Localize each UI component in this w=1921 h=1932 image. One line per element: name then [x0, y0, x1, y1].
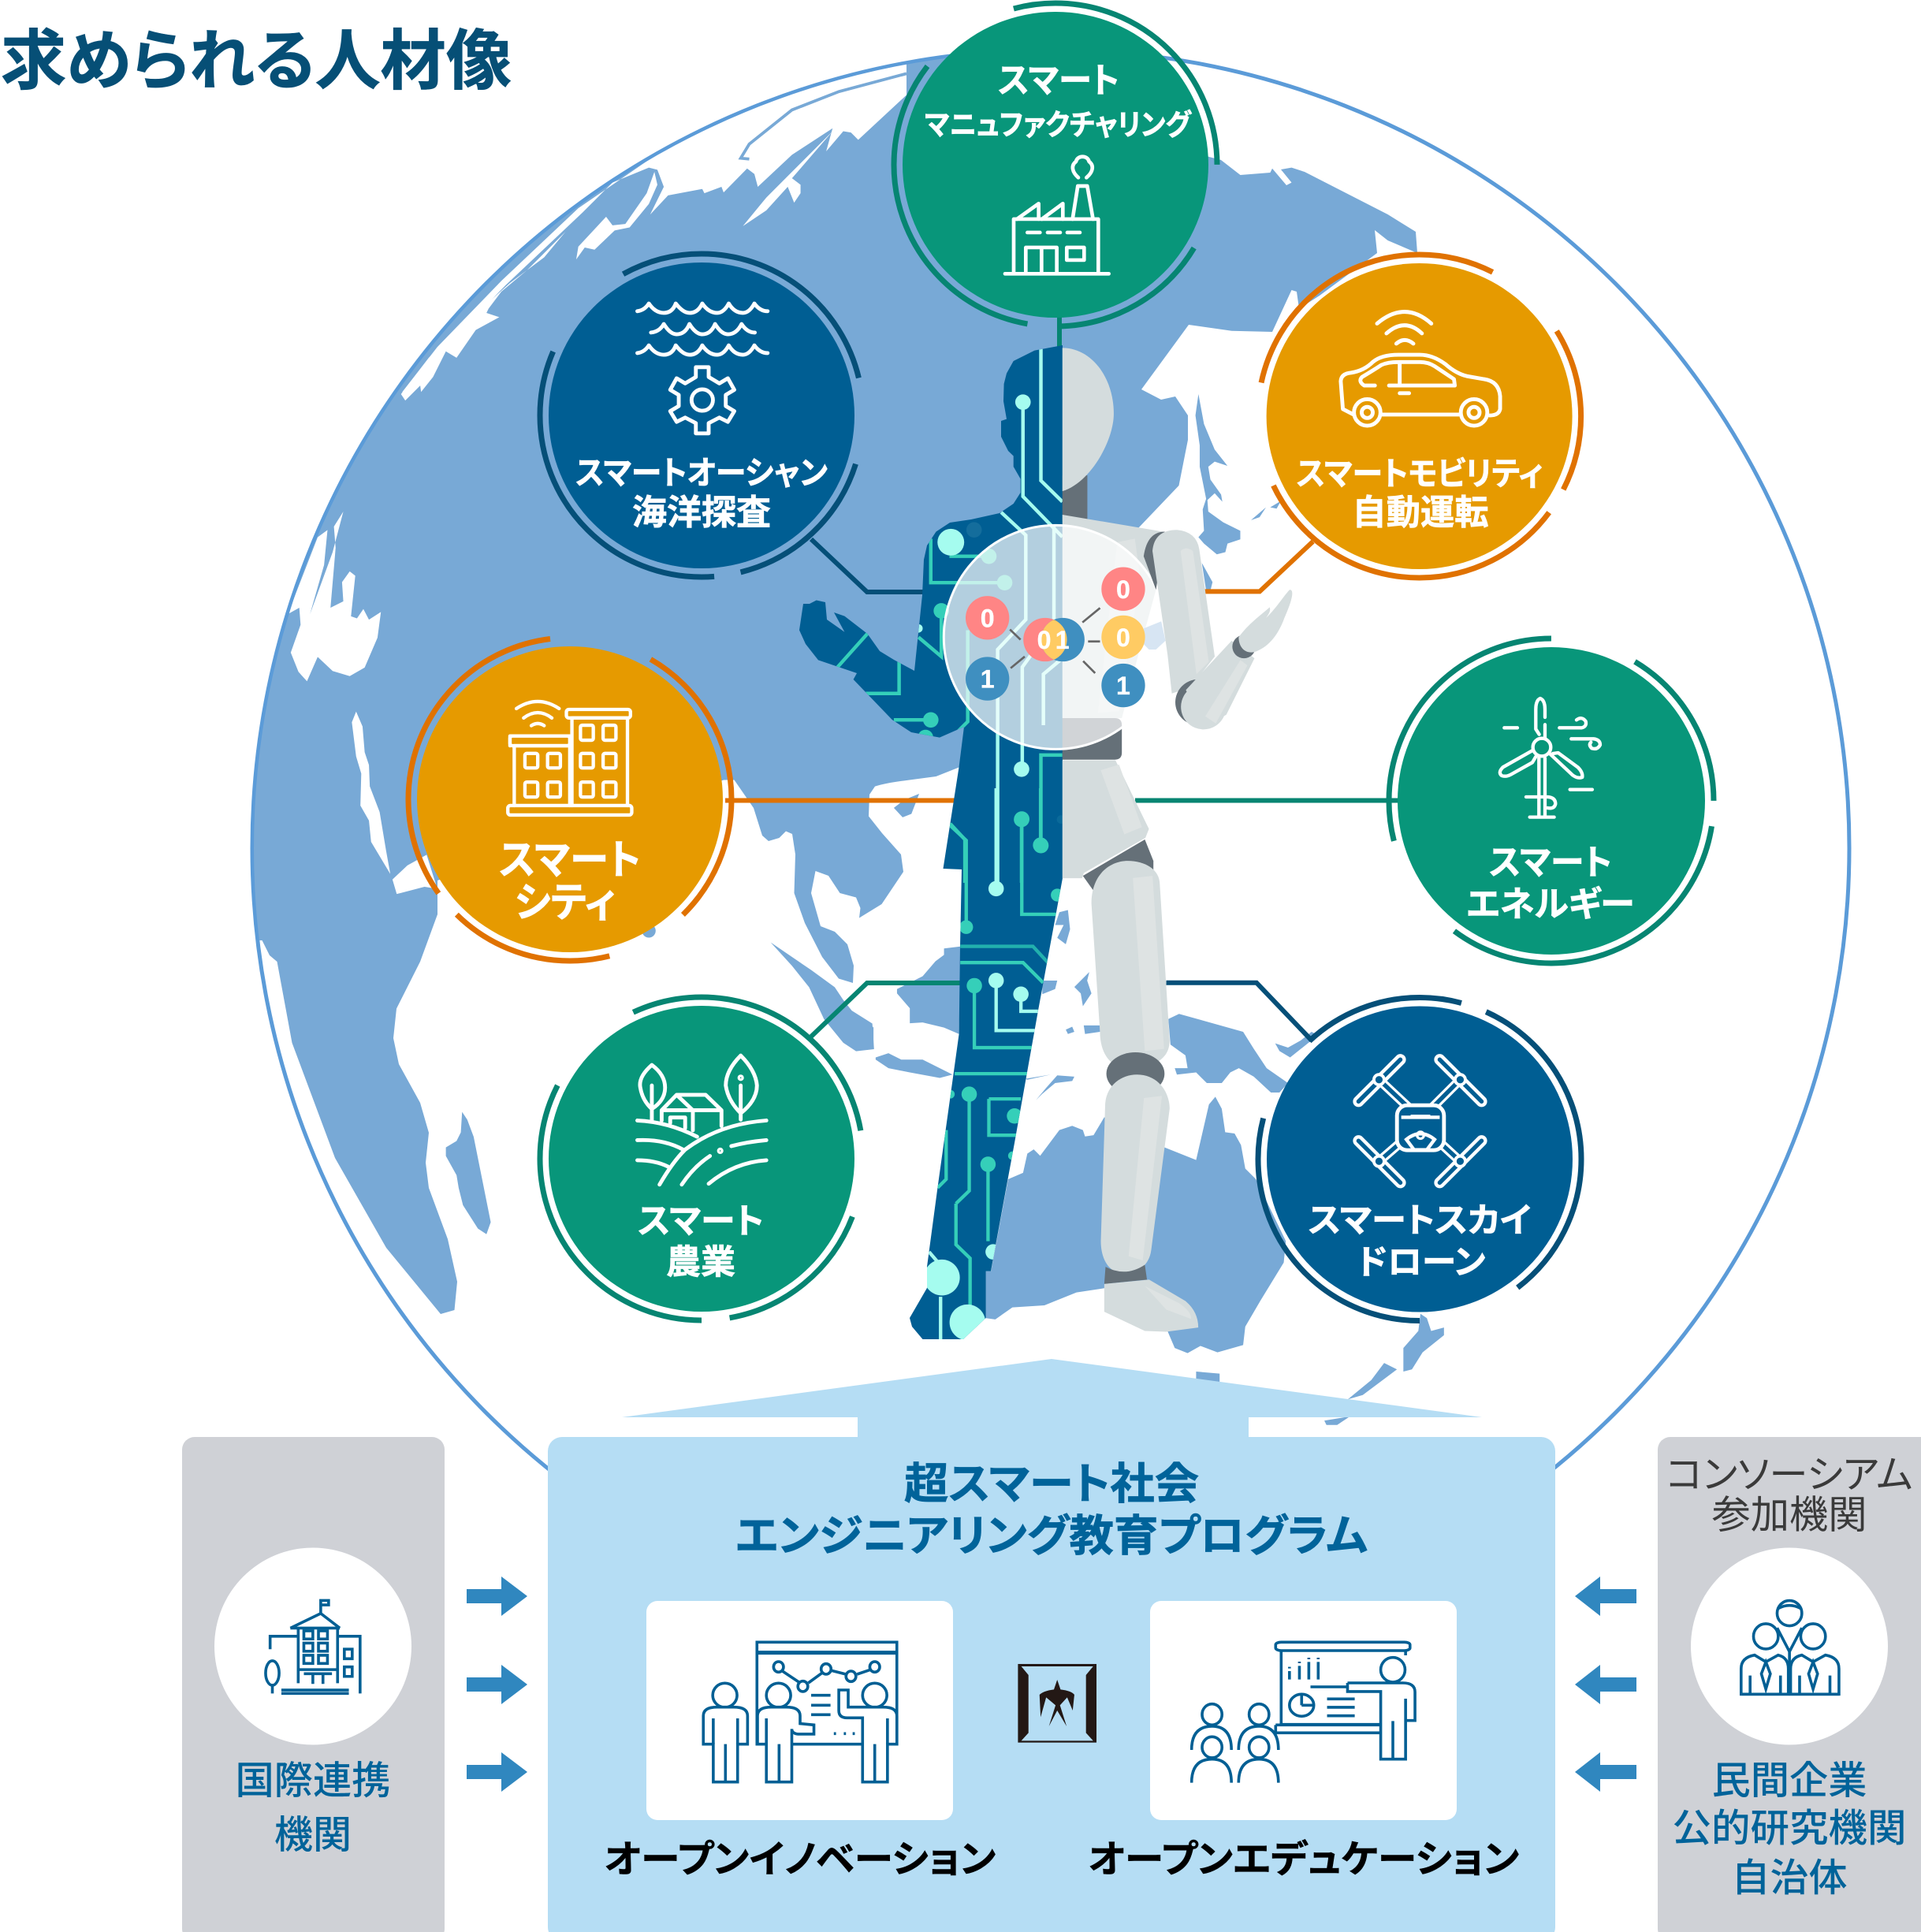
circuit traces [837, 348, 1065, 1340]
panel: smart city [408, 638, 732, 961]
connector: drone [1167, 983, 1312, 1040]
figure: human silhouette with circuit pattern [799, 345, 1065, 1340]
subheading: manufacturing: マニュファクチャリング [925, 109, 1193, 141]
figure: robot legs and foot [1083, 839, 1198, 1332]
label: open education: オープンエデュケーション [1088, 1839, 1520, 1881]
label: public research institutions: 公的研究機関 [1673, 1807, 1906, 1850]
arrows: left partner to program [467, 1576, 527, 1792]
label: consortium: コンソーシアム [1666, 1454, 1912, 1496]
arrows: right partner to program [1575, 1576, 1636, 1792]
icon: wind turbine [1500, 698, 1600, 817]
heading: smart: スマート [499, 838, 641, 884]
label: private companies: 民間企業 [1712, 1759, 1867, 1802]
diagram: binary nodes on chest: 0 [1037, 626, 1051, 654]
panel: smart mobility [1258, 255, 1581, 578]
connector: ocean [811, 539, 926, 592]
panel: smart ocean [540, 254, 863, 577]
connector: agriculture [811, 983, 966, 1037]
panel: super smart society engineering education program [548, 1437, 1555, 1932]
icon: waves and gear [637, 303, 768, 434]
label: open innovation: オープンイノベーション [604, 1839, 996, 1881]
heading: city: シティ [515, 880, 616, 926]
heading: smart mobility: スマートモビリティ [1296, 456, 1543, 492]
card: open education [1150, 1601, 1457, 1820]
heading: smart: スマート [638, 1202, 764, 1241]
icon: school building [266, 1600, 360, 1693]
panel: right partner [1658, 1437, 1921, 1932]
diagram: binary nodes on chest: 0 [1116, 575, 1130, 604]
connector: city [725, 798, 955, 802]
icon: buildings [508, 702, 631, 815]
icon: farm [637, 1055, 766, 1185]
card: open innovation [646, 1601, 953, 1820]
heading: smart: スマート [1489, 843, 1612, 882]
icon: connected car [1341, 312, 1500, 426]
connector: energy [1135, 798, 1399, 802]
heading: super smart society: 超スマート社会 [904, 1460, 1199, 1509]
heading: agriculture: 農業 [666, 1244, 735, 1282]
label: member institutions: 参加機関 [1712, 1495, 1867, 1537]
panel: smart agriculture [540, 997, 863, 1320]
panel: smart sky drone [1258, 998, 1581, 1321]
diagram: binary nodes on chest: 1 [981, 665, 995, 694]
arrow: upward pediment to program panel [622, 1359, 1482, 1442]
label: local governments: 自治体 [1731, 1857, 1848, 1900]
figure: robot arm and hand [1144, 530, 1292, 729]
subheading: marine exploration: 海洋探査 [632, 493, 771, 532]
icon: people at whiteboard [703, 1642, 897, 1782]
heading: smart sky: スマートスカイ [1309, 1202, 1531, 1240]
icon: team of people [1741, 1601, 1839, 1694]
panel: smart energy [1389, 638, 1714, 963]
seas: arctic and Europe cut-outs [288, 61, 907, 681]
label: institutions: 機関 [274, 1815, 352, 1857]
heading: engineering education program: エンジニアリング教育プログラム [735, 1512, 1368, 1561]
diagram: binary nodes on chest: 1 [1055, 626, 1070, 654]
globe outline [252, 50, 1849, 1647]
lens: translucent circle over chest [944, 525, 1167, 749]
icon: drone [1358, 1059, 1482, 1182]
heading: drone: ドローン [1357, 1244, 1485, 1282]
Japan and nearby islands [1196, 394, 1281, 590]
diagram: binary nodes on chest [966, 568, 1145, 707]
Indonesia, New Guinea, Australia and New Zealand [867, 910, 1444, 1425]
icon: presenter and audience [1192, 1642, 1415, 1783]
title: 求められる人材像 [1, 24, 512, 98]
heading: smart manufacturing: スマート [998, 61, 1119, 100]
diagram: binary nodes on chest: 0 [981, 604, 995, 632]
diagram: binary nodes on chest: 1 [1116, 672, 1130, 700]
heading: energy: エネルギー [1466, 885, 1635, 924]
diagram: binary nodes on chest: 0 [1116, 624, 1130, 652]
label: international institutions: 国際連携 [235, 1759, 391, 1802]
connector: mobility [1202, 542, 1313, 591]
logo: swallow emblem [1018, 1664, 1096, 1743]
subheading: autonomous driving: 自動運転 [1353, 493, 1488, 532]
heading: smart ocean: スマートオーシャン [575, 455, 828, 491]
land: Eurasia and Africa [221, 24, 1417, 1314]
panel: smart manufacturing [894, 3, 1217, 326]
seas and islands around Africa and South Asia [352, 712, 874, 1234]
icon: factory [1005, 157, 1109, 274]
Hainan island [894, 794, 919, 817]
panel: left partner [182, 1437, 445, 1932]
world map land [221, 24, 1444, 1425]
connector lines [725, 315, 1399, 1040]
figure: robot torso and head [1063, 348, 1166, 878]
connector: manufacturing [1057, 315, 1062, 351]
